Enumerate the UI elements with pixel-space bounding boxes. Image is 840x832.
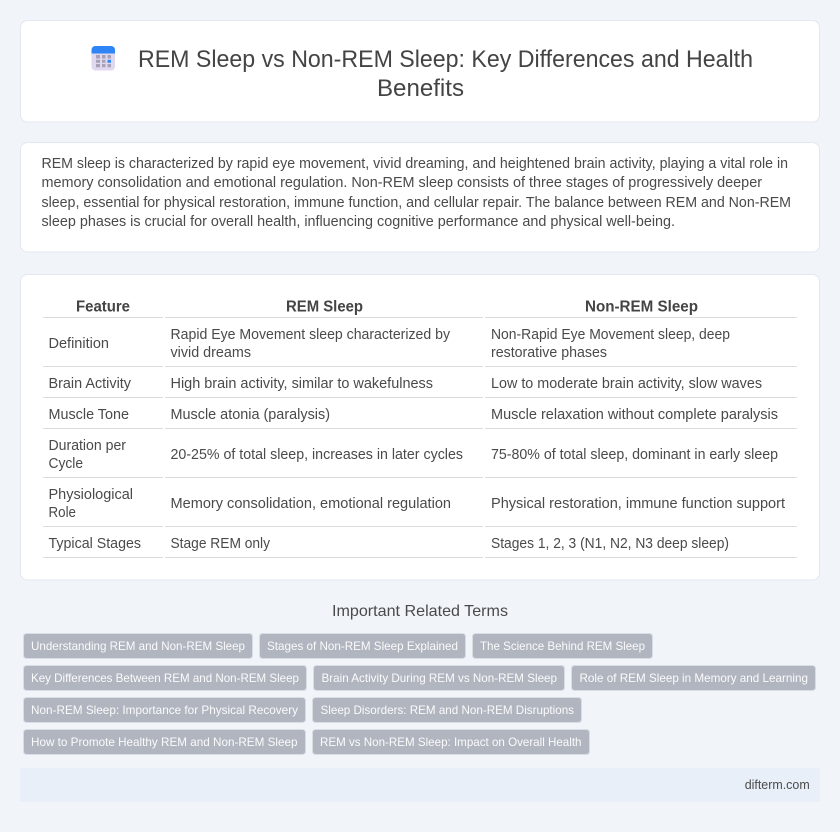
chip: key differences: Key Differences Between REM and Non-REM Sleep [31, 671, 299, 685]
chip: promote healthy: How to Promote Healthy REM and Non-REM Sleep [31, 735, 298, 749]
chip: understanding [24, 634, 252, 658]
table header row: Feature [76, 298, 130, 316]
chip: memory [572, 666, 816, 690]
row: typical stages [48, 536, 729, 552]
chip: disorders: Sleep Disorders: REM and Non-REM Disruptions [320, 703, 574, 717]
row: physiological role: Memory consolidation, emotional regulation [170, 496, 451, 512]
table header row: Non-REM Sleep [585, 298, 698, 316]
row: duration per cycle: Duration per [48, 438, 126, 454]
footer: difterm.com [745, 777, 810, 792]
icon: calendar [92, 46, 115, 70]
table header row: REM Sleep [286, 298, 363, 316]
row: duration per cycle: 75-80% of total sleep, dominant in early sleep [491, 447, 778, 463]
row: definition: Rapid Eye Movement sleep characterized by [170, 327, 451, 343]
text block: description paragraph: memory consolidation and emotional regulation. Non-REM sleep consists of three stages of progressively deeper [42, 175, 762, 191]
panel: related term chips [24, 634, 816, 754]
row: definition [48, 327, 730, 361]
row: brain activity: Low to moderate brain activity, slow waves [491, 376, 762, 392]
footer [20, 768, 820, 802]
text block: description paragraph: sleep phases is crucial for overall health, influencing cognitive performance and physical well-being. [42, 214, 675, 230]
text block: description paragraph [42, 156, 791, 230]
panel: comparison table [20, 274, 820, 580]
chip: brain activity: Brain Activity During REM vs Non-REM Sleep [322, 671, 557, 685]
chip: disorders [312, 698, 582, 722]
row: definition: Definition [48, 336, 109, 352]
row: duration per cycle: 20-25% of total sleep, increases in later cycles [170, 447, 463, 463]
row: physiological role: Physiological [48, 487, 133, 503]
row: typical stages: Stage REM only [170, 536, 271, 552]
row: brain activity [48, 376, 762, 392]
row: brain activity: High brain activity, similar to wakefulness [170, 376, 433, 392]
row: muscle tone [48, 407, 778, 423]
row: physiological role: Role [48, 505, 76, 521]
row: definition: Non-Rapid Eye Movement sleep, deep [491, 327, 730, 343]
row: typical stages: Stages 1, 2, 3 (N1, N2, N3 deep sleep) [491, 536, 729, 552]
title: REM Sleep vs Non-REM Sleep: Key Differences and Health [138, 46, 753, 73]
chip: overall health: REM vs Non-REM Sleep: Impact on Overall Health [320, 735, 582, 749]
chip: key differences [24, 666, 306, 690]
row: muscle tone: Muscle atonia (paralysis) [170, 407, 330, 423]
chip: physical recovery: Non-REM Sleep: Importance for Physical Recovery [31, 703, 298, 717]
heading: important related terms: Important Related Terms [332, 603, 508, 620]
row: muscle tone: Muscle Tone [48, 407, 129, 423]
chip: understanding: Understanding REM and Non-REM Sleep [31, 639, 245, 653]
row: duration per cycle [48, 438, 778, 472]
row: physiological role [48, 487, 785, 521]
chip: memory: Role of REM Sleep in Memory and Learning [580, 671, 808, 685]
title [138, 46, 753, 102]
text block: description paragraph: REM sleep is characterized by rapid eye movement, vivid dreaming, and heightened brain activity, playing a vital role in [42, 156, 788, 172]
text block: description paragraph: sleep, essential for physical restoration, immune function, and cellular repair. The balance between REM and Non-REM [42, 195, 791, 211]
chip: overall health [312, 730, 590, 754]
row: muscle tone: Muscle relaxation without complete paralysis [491, 407, 778, 423]
row: brain activity: Brain Activity [48, 376, 132, 392]
chip: brain activity [314, 666, 564, 690]
row: definition: restorative phases [491, 345, 607, 361]
chip: promote healthy [24, 730, 306, 754]
chip: science: The Science Behind REM Sleep [480, 639, 645, 653]
chip: stages [260, 634, 466, 658]
row: definition: vivid dreams [170, 345, 251, 361]
row: duration per cycle: Cycle [48, 456, 83, 472]
table header row [76, 298, 698, 316]
row: physiological role: Physical restoration, immune function support [491, 496, 785, 512]
chip: stages: Stages of Non-REM Sleep Explained [267, 639, 458, 653]
row: typical stages: Typical Stages [48, 536, 141, 552]
title: Benefits [377, 75, 464, 102]
panel: description [20, 142, 820, 252]
chip: science [472, 634, 652, 658]
panel: header [20, 20, 820, 122]
chip: physical recovery [24, 698, 306, 722]
